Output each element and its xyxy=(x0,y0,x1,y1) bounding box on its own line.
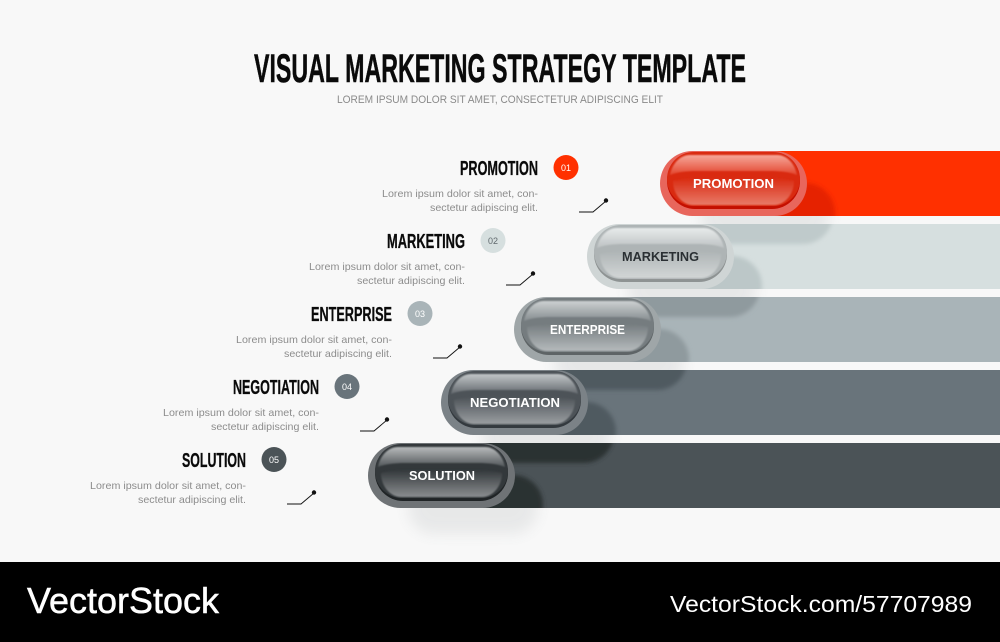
soft shadows on background xyxy=(408,190,830,534)
item: marketing label xyxy=(309,228,535,287)
cast shadows on bars xyxy=(486,182,836,508)
description: sectetur adipiscing elit. xyxy=(357,275,465,287)
pill: negotiation: NEGOTIATION xyxy=(470,395,560,410)
footer url: VectorStock.com/57707989 xyxy=(670,591,972,617)
description: Lorem ipsum dolor sit amet, con- xyxy=(90,480,246,492)
item: promotion label xyxy=(382,155,608,214)
description: sectetur adipiscing elit. xyxy=(430,202,538,214)
number badge 03 xyxy=(408,301,432,326)
connector xyxy=(433,344,462,358)
number badge 05: 05 xyxy=(269,455,279,465)
pill: promotion xyxy=(660,151,807,216)
heading: enterprise: ENTERPRISE xyxy=(311,304,392,326)
heading: negotiation: NEGOTIATION xyxy=(233,377,319,399)
footer band xyxy=(0,562,1000,642)
subtitle: LOREM IPSUM DOLOR SIT AMET, CONSECTETUR ADIPISCING ELIT xyxy=(337,94,663,106)
pill: enterprise: ENTERPRISE xyxy=(550,322,625,337)
pill: solution xyxy=(368,443,515,508)
connector xyxy=(579,198,608,212)
number badge 05 xyxy=(262,447,286,472)
pill: marketing xyxy=(587,224,734,289)
bar: marketing xyxy=(660,224,1000,289)
number badge 02 xyxy=(480,228,506,253)
number badge 03: 03 xyxy=(415,309,425,319)
description: Lorem ipsum dolor sit amet, con- xyxy=(309,261,465,273)
description: sectetur adipiscing elit. xyxy=(284,348,392,360)
item: solution label xyxy=(90,447,316,506)
number badge 01: 01 xyxy=(561,163,571,173)
bar: promotion xyxy=(733,151,1000,216)
description: Lorem ipsum dolor sit amet, con- xyxy=(382,188,538,200)
pill: solution: SOLUTION xyxy=(409,468,475,483)
connector xyxy=(360,417,389,431)
pill: negotiation xyxy=(441,370,588,435)
description: Lorem ipsum dolor sit amet, con- xyxy=(163,407,319,419)
pill: promotion: PROMOTION xyxy=(693,176,774,191)
footer logo: VectorStock xyxy=(27,580,220,621)
bar: enterprise xyxy=(587,297,1000,362)
number badge 04: 04 xyxy=(342,382,352,392)
number badge 02: 02 xyxy=(488,236,498,246)
pill: enterprise xyxy=(514,297,661,362)
connector xyxy=(287,490,316,504)
connector xyxy=(506,271,535,285)
heading: promotion: PROMOTION xyxy=(460,158,538,180)
bar: negotiation xyxy=(514,370,1000,435)
heading: marketing: MARKETING xyxy=(387,231,465,253)
item: enterprise label xyxy=(236,301,462,360)
description: Lorem ipsum dolor sit amet, con- xyxy=(236,334,392,346)
pill: marketing: MARKETING xyxy=(622,249,699,264)
number badge 04 xyxy=(334,374,360,399)
heading: solution: SOLUTION xyxy=(182,450,246,472)
number badge 01 xyxy=(554,155,578,180)
description: sectetur adipiscing elit. xyxy=(211,421,319,433)
description: sectetur adipiscing elit. xyxy=(138,494,246,506)
item: negotiation label xyxy=(163,374,389,433)
bar: solution xyxy=(441,443,1000,508)
